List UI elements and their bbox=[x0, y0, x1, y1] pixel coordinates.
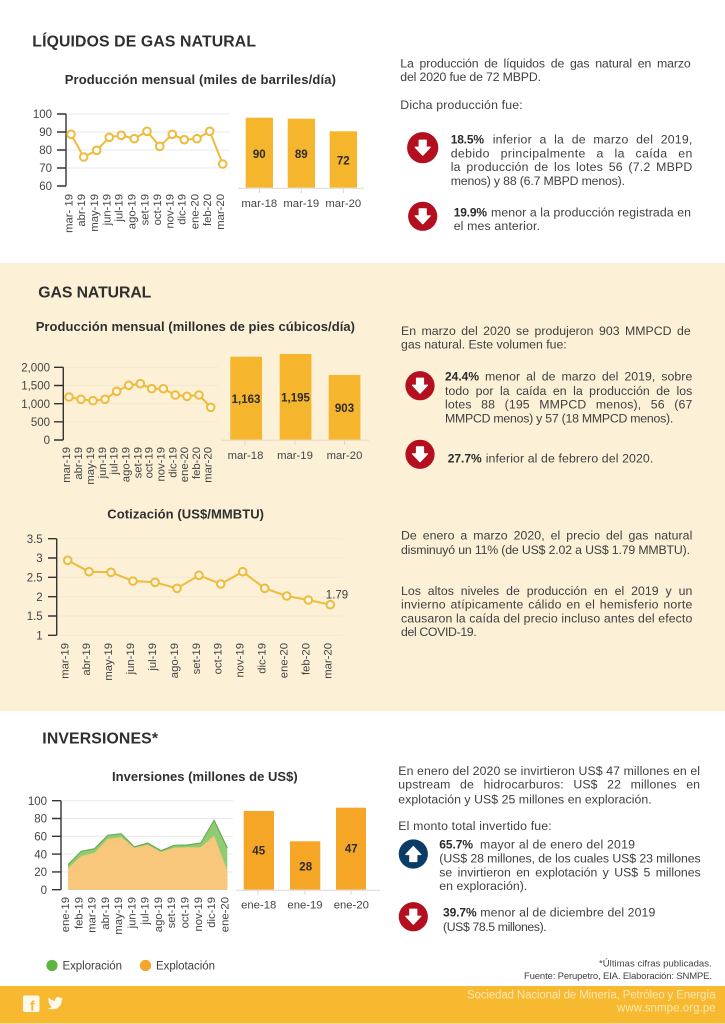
text block: 24.4% menor: lotes 88 (195 MMPCD menos), 56 (67 bbox=[445, 398, 692, 412]
text block: 24.4% menor bbox=[445, 370, 692, 425]
line chart: producción mensual de gas: oct-19 bbox=[144, 447, 156, 478]
line chart: cotización: 1.5 bbox=[27, 611, 43, 623]
bar chart: gas marzo: mar-19 bbox=[277, 450, 313, 462]
heading: inversiones: INVERSIONES* bbox=[42, 730, 159, 747]
area chart: inversiones mensuales: ene-20 bbox=[219, 897, 231, 932]
line chart: producción mensual de líquidos: abr-19 bbox=[76, 194, 88, 227]
text block: 19.9% menor bbox=[454, 205, 691, 233]
area chart: inversiones mensuales: dic-19 bbox=[206, 897, 218, 928]
text block: resumen inversiones: explotación y US$ 25 millones en exploración. bbox=[398, 792, 652, 806]
line chart: producción mensual de gas: abr-19 bbox=[73, 447, 85, 480]
panel: inversiones bbox=[28, 730, 712, 982]
line chart: producción mensual de gas: mar-20 bbox=[203, 447, 215, 483]
bar chart: gas marzo: 1,195 bbox=[281, 393, 310, 405]
line chart: cotización: nov-19 bbox=[235, 643, 247, 678]
text block: 65.7% mayor bbox=[439, 837, 701, 893]
line chart: producción mensual de gas: nov-19 bbox=[155, 447, 167, 482]
line chart: cotización: jul-19 bbox=[147, 643, 159, 672]
line chart: producción mensual de líquidos: jun-19 bbox=[102, 194, 114, 226]
text block: 18.5% inferior: debido principalmente a la caída en bbox=[451, 147, 692, 161]
line chart: cotización bbox=[27, 534, 348, 681]
text block: 19.9% menor: menor a la producción registrada en bbox=[491, 205, 691, 219]
line chart: cotización: 1.79 bbox=[326, 590, 348, 602]
line chart: producción mensual de gas: ene-20 bbox=[179, 447, 191, 482]
line chart: producción mensual de líquidos: may-19 bbox=[89, 194, 101, 232]
area chart: inversiones mensuales: 100 bbox=[28, 796, 47, 808]
line chart: cotización: 1 bbox=[36, 630, 43, 642]
footnote: fuente: *Últimas cifras publicadas. bbox=[599, 959, 712, 970]
text block: 39.7% menor: (US$ 78.5 millones). bbox=[443, 920, 547, 934]
text block: 24.4% menor: menor al de marzo del 2019, sobre bbox=[485, 370, 692, 384]
area chart: inversiones mensuales: jul-19 bbox=[140, 897, 152, 926]
area chart: inversiones mensuales: ene-19 bbox=[60, 897, 72, 932]
text block: 18.5% inferior: la producción de los lotes 56 (7.2 MBPD bbox=[451, 160, 692, 174]
text block: resumen líquidos: Dicha producción fue: bbox=[400, 98, 523, 112]
line chart: cotización: may-19 bbox=[103, 643, 115, 681]
heading: gas natural: GAS NATURAL bbox=[38, 284, 152, 301]
text block: resumen inversiones: El monto total invertido fue: bbox=[398, 819, 552, 833]
text block: 65.7% mayor: 65.7% bbox=[439, 837, 473, 851]
line chart: producción mensual de líquidos: oct-19 bbox=[152, 194, 164, 225]
line chart: cotización: set-19 bbox=[191, 643, 203, 674]
icon: twitter bbox=[48, 997, 63, 1009]
text block: 65.7% mayor: (US$ 28 millones, de los cuales US$ 23 millones bbox=[439, 852, 701, 866]
text block: 27.7% inferior: 27.7% bbox=[448, 451, 482, 465]
legend: exploración y explotación bbox=[46, 960, 215, 973]
text block: resumen líquidos bbox=[400, 57, 691, 112]
line chart: cotización: dic-19 bbox=[257, 643, 269, 674]
text block: resumen inversiones bbox=[398, 764, 700, 833]
icon: facebook bbox=[23, 996, 40, 1014]
line chart: cotización: mar-19 bbox=[60, 643, 72, 679]
line chart: producción mensual de gas: 0 bbox=[44, 435, 50, 447]
chart title: inversiones: Inversiones (millones de US$) bbox=[112, 769, 298, 784]
line chart: producción mensual de líquidos: 90 bbox=[39, 127, 52, 139]
panel: gas natural background band bbox=[0, 263, 725, 711]
area chart: inversiones mensuales: mar-19 bbox=[87, 897, 99, 933]
heading: líquidos de gas natural: LÍQUIDOS DE GAS NATURAL bbox=[32, 32, 256, 51]
bar chart: gas marzo: mar-20 bbox=[327, 450, 362, 462]
text block: resumen gas bbox=[401, 324, 691, 351]
text block: resumen líquidos: La producción de líquidos de gas natural en marzo bbox=[400, 57, 691, 71]
line chart: producción mensual de líquidos: mar-20 bbox=[215, 194, 227, 230]
area chart: inversiones mensuales: 20 bbox=[34, 867, 47, 879]
line chart: cotización: mar-20 bbox=[322, 643, 334, 679]
line chart: cotización: 2 bbox=[36, 592, 43, 604]
text block: 65.7% mayor: en exploración). bbox=[439, 879, 527, 893]
text block: precio del gas bbox=[401, 529, 692, 639]
line chart: producción mensual de líquidos: 100 bbox=[33, 109, 52, 121]
text block: precio del gas: del COVID-19. bbox=[401, 625, 477, 639]
legend: exploración y explotación: Exploración bbox=[62, 961, 122, 973]
text block: 27.7% inferior: inferior al de febrero del 2020. bbox=[486, 451, 653, 465]
text block: precio del gas: disminuyó un 11% (de US$ 2.02 a US$ 1.79 MMBTU). bbox=[401, 543, 690, 557]
bar chart: inversiones enero: 45 bbox=[252, 846, 266, 858]
text block: 18.5% inferior: 18.5% bbox=[451, 132, 484, 146]
area chart: inversiones mensuales: 60 bbox=[34, 832, 47, 844]
bar chart: gas marzo: 903 bbox=[335, 403, 354, 415]
text block: 39.7% menor: 39.7% bbox=[443, 906, 477, 920]
text block: 24.4% menor: 24.4% bbox=[445, 370, 479, 384]
line chart: cotización: 3.5 bbox=[27, 534, 43, 546]
bar chart: inversiones enero: 28 bbox=[299, 862, 313, 874]
line chart: producción mensual de gas: may-19 bbox=[85, 447, 97, 485]
bar chart: inversiones enero: 47 bbox=[345, 844, 358, 856]
bar chart: líquidos marzo: mar-20 bbox=[325, 198, 361, 210]
line chart: producción mensual de gas: mar-19 bbox=[61, 447, 73, 483]
area chart: inversiones mensuales: ago-19 bbox=[153, 897, 165, 932]
footer text: web: www.snmpe.org.pe bbox=[616, 1003, 716, 1015]
line chart: producción mensual de líquidos: 60 bbox=[39, 181, 52, 193]
text block: 24.4% menor: todo por la caída en la producción de los bbox=[445, 384, 692, 398]
footnote: fuente bbox=[524, 959, 712, 982]
text block: resumen líquidos: del 2020 fue de 72 MBPD. bbox=[400, 70, 541, 84]
text block: resumen gas: En marzo del 2020 se produjeron 903 MMPCD de bbox=[401, 324, 691, 338]
line chart: cotización: 3 bbox=[36, 553, 43, 565]
line chart: producción mensual de líquidos: ago-19 bbox=[127, 194, 139, 229]
line chart: cotización: ago-19 bbox=[169, 643, 181, 678]
text block: 18.5% inferior: menos) y 88 (6.7 MBPD menos). bbox=[451, 174, 625, 188]
footer bbox=[0, 986, 725, 1024]
line chart: producción mensual de líquidos: mar- 19 bbox=[63, 194, 75, 233]
icon: flecha abajo bbox=[408, 202, 437, 231]
line chart: producción mensual de gas: 1,000 bbox=[21, 399, 50, 411]
text block: 65.7% mayor: mayor al de enero del 2019 bbox=[480, 837, 635, 851]
icon: flecha abajo bbox=[405, 371, 435, 400]
bar chart: líquidos marzo: 89 bbox=[295, 149, 308, 161]
line chart: producción mensual de líquidos: jul-19 bbox=[114, 194, 126, 223]
area chart: inversiones mensuales: jun-19 bbox=[126, 897, 138, 929]
line chart: producción mensual de gas: jun-19 bbox=[97, 447, 109, 479]
line chart: producción mensual de líquidos: ene-20 bbox=[189, 194, 201, 229]
icon: flecha abajo bbox=[405, 440, 435, 469]
line chart: producción mensual de líquidos bbox=[33, 109, 230, 233]
line chart: producción mensual de gas: set-19 bbox=[132, 447, 144, 478]
line chart: cotización: 2.5 bbox=[27, 572, 43, 584]
bar chart: líquidos marzo: 90 bbox=[253, 149, 266, 161]
text block: precio del gas: causaron la caída del precio incluso antes del efecto bbox=[401, 611, 692, 625]
text block: resumen inversiones: upstream de hidrocarburos: US$ 22 millones en bbox=[398, 778, 700, 792]
text block: precio del gas: invierno atípicamente cálido en el hemisferio norte bbox=[401, 598, 692, 612]
line chart: producción mensual de líquidos: 70 bbox=[39, 163, 52, 175]
bar chart: líquidos marzo: mar-19 bbox=[283, 198, 319, 210]
area chart: inversiones mensuales: oct-19 bbox=[180, 897, 192, 928]
area chart: inversiones mensuales: 80 bbox=[34, 814, 47, 826]
area chart: inversiones mensuales: 0 bbox=[41, 885, 47, 897]
icon: flecha abajo bbox=[399, 902, 428, 931]
text block: precio del gas: Los altos niveles de producción en el 2019 y un bbox=[401, 584, 692, 598]
panel: gas natural bbox=[21, 284, 692, 681]
line chart: cotización: oct-19 bbox=[213, 643, 225, 674]
bar chart: gas marzo: mar-18 bbox=[228, 450, 263, 462]
line chart: cotización: jun-19 bbox=[125, 643, 137, 675]
line chart: producción mensual de gas: 1,500 bbox=[21, 381, 50, 393]
bar chart: inversiones enero: ene-18 bbox=[241, 900, 276, 912]
icon: flecha abajo bbox=[407, 132, 438, 163]
chart title: producción mensual de líquidos: Producción mensual (miles de barriles/día) bbox=[65, 72, 336, 87]
footer text: organización: Sociedad Nacional de Minería, Petróleo y Energía bbox=[467, 990, 716, 1002]
text block: 39.7% menor bbox=[443, 906, 655, 934]
line chart: cotización: abr-19 bbox=[81, 643, 93, 676]
area chart: inversiones mensuales bbox=[28, 796, 233, 935]
line chart: producción mensual de gas: jul-19 bbox=[109, 447, 121, 476]
text block: resumen inversiones: En enero del 2020 se invirtieron US$ 47 millones en el bbox=[398, 764, 700, 778]
area chart: inversiones mensuales: may-19 bbox=[113, 897, 125, 935]
bar chart: gas marzo: 1,163 bbox=[232, 394, 260, 406]
text block: 18.5% inferior: inferior a la de marzo del 2019, bbox=[493, 132, 692, 146]
bar chart: líquidos marzo bbox=[238, 118, 364, 210]
line chart: producción mensual de líquidos: nov-19 bbox=[165, 194, 177, 229]
bar chart: líquidos marzo: mar-18 bbox=[241, 198, 277, 210]
bar chart: líquidos marzo: 72 bbox=[337, 156, 350, 168]
line chart: producción mensual de líquidos: set-19 bbox=[139, 194, 151, 225]
line chart: cotización: feb-20 bbox=[300, 643, 312, 675]
text block: 18.5% inferior bbox=[451, 132, 692, 188]
line chart: producción mensual de gas: dic-19 bbox=[167, 447, 179, 478]
line chart: producción mensual de líquidos: feb-20 bbox=[202, 194, 214, 226]
line chart: producción mensual de gas: 2,000 bbox=[21, 362, 50, 374]
text block: 19.9% menor: 19.9% bbox=[454, 205, 487, 219]
icon: flecha arriba bbox=[399, 839, 428, 869]
line chart: producción mensual de líquidos: dic-19 bbox=[177, 194, 189, 225]
line chart: producción mensual de gas bbox=[21, 362, 218, 485]
area chart: inversiones mensuales: abr-19 bbox=[100, 897, 112, 930]
chart title: producción mensual de gas: Producción mensual (millones de pies cúbicos/día) bbox=[36, 319, 355, 334]
text block: 19.9% menor: el mes anterior. bbox=[454, 219, 540, 233]
text block: precio del gas: De enero a marzo 2020, el precio del gas natural bbox=[401, 529, 692, 543]
bar chart: inversiones enero: ene-19 bbox=[287, 900, 323, 912]
line chart: producción mensual de gas: ago-19 bbox=[121, 447, 133, 482]
icon: facebook: f bbox=[30, 998, 35, 1014]
line chart: producción mensual de líquidos: 80 bbox=[39, 145, 52, 157]
area chart: inversiones mensuales: 40 bbox=[34, 849, 47, 861]
panel: líquidos de gas natural bbox=[32, 32, 692, 233]
text block: 65.7% mayor: se invirtieron en explotación y US$ 5 millones bbox=[439, 866, 701, 880]
area chart: inversiones mensuales: nov-19 bbox=[193, 897, 205, 932]
legend: exploración y explotación: Explotación bbox=[156, 961, 215, 973]
bar chart: inversiones enero bbox=[236, 808, 380, 912]
text block: 24.4% menor: MMPCD menos) y 57 (18 MMPCD menos). bbox=[445, 411, 673, 425]
chart title: cotización: Cotización (US$/MMBTU) bbox=[107, 506, 264, 521]
footnote: fuente: Fuente: Perupetro, EIA. Elaboración: SNMPE. bbox=[524, 971, 712, 982]
line chart: cotización: ene-20 bbox=[279, 643, 291, 678]
line chart: producción mensual de gas: feb-20 bbox=[191, 447, 203, 479]
line chart: producción mensual de gas: 500 bbox=[31, 417, 50, 429]
text block: 39.7% menor: menor al de diciembre del 2019 bbox=[480, 906, 655, 920]
area chart: inversiones mensuales: feb-19 bbox=[73, 897, 85, 929]
area chart: inversiones mensuales: set-19 bbox=[166, 897, 178, 928]
bar chart: gas marzo bbox=[221, 354, 369, 462]
text block: resumen gas: gas natural. Este volumen fue: bbox=[401, 337, 567, 351]
bar chart: inversiones enero: ene-20 bbox=[334, 900, 369, 912]
